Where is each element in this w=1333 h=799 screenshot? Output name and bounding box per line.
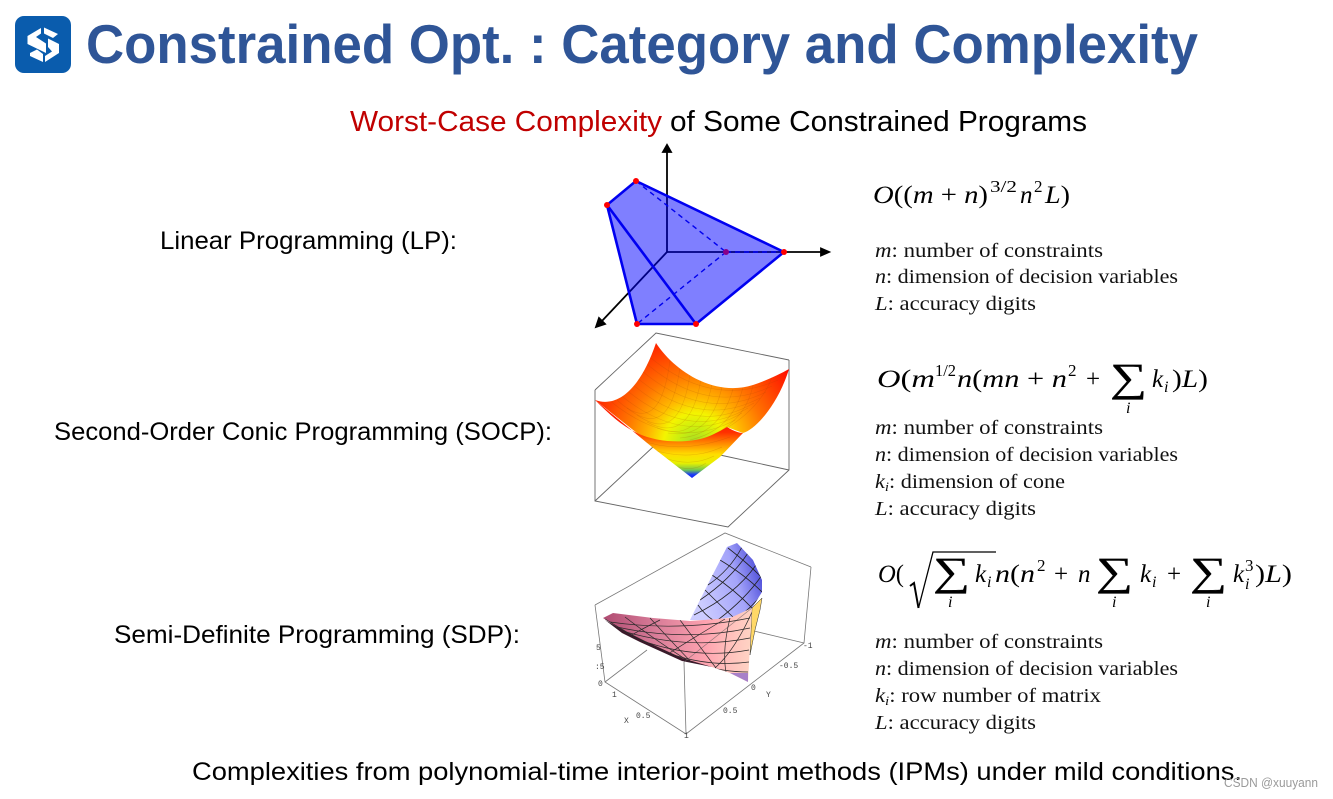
formula: SOCP complexity bbox=[877, 355, 1208, 417]
watermark: CSDN @xuuyann bbox=[1224, 775, 1318, 790]
formula: SDP complexity: + bbox=[1054, 561, 1068, 588]
legend: SDP variables: i bbox=[885, 693, 890, 708]
formula: LP complexity: L) bbox=[1044, 182, 1070, 209]
legend: SDP variables: n: dimension of decision variables bbox=[875, 659, 1178, 680]
legend: LP variables: n: dimension of decision variables bbox=[875, 267, 1178, 288]
diagram: SDP surface: 0 bbox=[751, 684, 756, 693]
diagram: SDP surface: 1 bbox=[612, 691, 617, 700]
formula: SDP complexity: 3 bbox=[1245, 556, 1254, 575]
legend: SDP variables bbox=[874, 632, 1178, 734]
formula: LP complexity: n bbox=[1020, 182, 1032, 209]
formula: SOCP complexity: )L) bbox=[1172, 366, 1208, 393]
subtitle bbox=[350, 106, 1087, 138]
axes with arrows bbox=[596, 145, 829, 327]
legend: SOCP variables: k bbox=[875, 472, 889, 494]
legend: SDP variables: L: accuracy digits bbox=[874, 713, 1036, 734]
diagram: SOCP cone surface bbox=[595, 333, 789, 527]
formula: SDP complexity: i bbox=[987, 574, 991, 591]
formula: SDP complexity: i bbox=[1152, 574, 1156, 591]
title: Constrained Opt. : Category and Complexity bbox=[86, 13, 1198, 75]
diagram: SDP surface: 0.5 bbox=[723, 707, 738, 716]
diagram: SDP surface: 1 bbox=[684, 732, 689, 741]
legend: SOCP variables: m: number of constraints bbox=[875, 418, 1103, 439]
legend: LP variables: L: accuracy digits bbox=[874, 294, 1036, 315]
formula: SDP complexity bbox=[878, 549, 1292, 611]
subtitle: of Some Constrained Programs bbox=[670, 106, 1087, 138]
legend: SDP variables: k bbox=[875, 686, 890, 708]
formula: SDP complexity: i bbox=[1206, 594, 1210, 611]
formula: LP complexity: 2 bbox=[1034, 177, 1042, 196]
formula: SOCP complexity: + bbox=[1086, 366, 1100, 393]
formula: SDP complexity: n bbox=[1078, 561, 1090, 588]
diagram: SDP surface: 0.5 bbox=[636, 712, 651, 721]
diagram: SDP surface: Y bbox=[766, 691, 771, 700]
formula: SDP complexity: k bbox=[1140, 561, 1152, 588]
legend: LP variables: m: number of constraints bbox=[875, 241, 1103, 262]
legend: SOCP variables: : dimension of cone bbox=[889, 472, 1065, 493]
label: linear programming: Linear Programming (LP): bbox=[160, 227, 457, 255]
formula: SDP complexity: k bbox=[975, 561, 987, 588]
formula: SDP complexity: + bbox=[1167, 561, 1181, 588]
formula: SDP complexity: ∑ bbox=[1096, 549, 1133, 594]
legend: SDP variables: m: number of constraints bbox=[875, 632, 1103, 653]
formula: SDP complexity: ∑ bbox=[1190, 549, 1227, 594]
subtitle: Worst-Case Complexity bbox=[350, 106, 662, 138]
legend: SOCP variables bbox=[874, 418, 1178, 520]
formula: SOCP complexity: k bbox=[1152, 366, 1164, 393]
diagram: SDP surface: X bbox=[624, 717, 629, 726]
formula: SOCP complexity: ∑ bbox=[1110, 355, 1147, 400]
formula: SDP complexity: )L) bbox=[1255, 561, 1292, 588]
label: second-order conic programming: Second-Order Conic Programming (SOCP): bbox=[54, 418, 552, 446]
formula: SDP complexity: 2 bbox=[1037, 556, 1046, 575]
diagram: SDP surface: :5 bbox=[595, 663, 605, 672]
diagram: SDP surface: 0 bbox=[598, 680, 603, 689]
formula: SOCP complexity: 1/2 bbox=[935, 361, 956, 380]
formula: SDP complexity: n(n bbox=[995, 561, 1035, 588]
formula: SDP complexity: i bbox=[1245, 576, 1249, 593]
label: semi-definite programming: Semi-Definite Programming (SDP): bbox=[114, 621, 520, 649]
diagram: SDP surface: 5 bbox=[596, 644, 601, 653]
legend: SOCP variables: L: accuracy digits bbox=[874, 499, 1036, 520]
formula: SOCP complexity: i bbox=[1126, 400, 1130, 417]
formula: SOCP complexity: n(mn + n bbox=[957, 366, 1067, 393]
formula: SDP complexity: k bbox=[1233, 561, 1245, 588]
footnote: Complexities from polynomial-time interior-point methods (IPMs) under mild conditions. bbox=[192, 758, 1242, 786]
formula: SDP complexity: i bbox=[948, 594, 952, 611]
legend: SOCP variables: n: dimension of decision variables bbox=[875, 445, 1178, 466]
formula: SOCP complexity: i bbox=[1164, 379, 1168, 396]
formula: SOCP complexity: O(m bbox=[877, 366, 935, 393]
formula: SOCP complexity: 2 bbox=[1068, 361, 1076, 380]
formula: LP complexity bbox=[873, 177, 1070, 209]
legend: LP variables bbox=[874, 241, 1178, 315]
formula: SDP complexity: i bbox=[1112, 594, 1116, 611]
diagram: SDP surface: -1 bbox=[803, 642, 813, 651]
formula: LP complexity: 3/2 bbox=[990, 177, 1017, 196]
formula: SDP complexity: ∑ bbox=[933, 549, 970, 594]
legend: SDP variables: : row number of matrix bbox=[889, 686, 1101, 707]
formula: SDP complexity: O( bbox=[878, 561, 904, 588]
formula: LP complexity: O((m + n) bbox=[873, 182, 988, 209]
legend: SOCP variables: i bbox=[885, 479, 889, 494]
diagram: LP polyhedron bbox=[596, 145, 829, 327]
logo icon bbox=[15, 16, 71, 73]
diagram: SDP surface: -0.5 bbox=[779, 662, 798, 671]
diagram: SDP surface bbox=[595, 533, 813, 741]
